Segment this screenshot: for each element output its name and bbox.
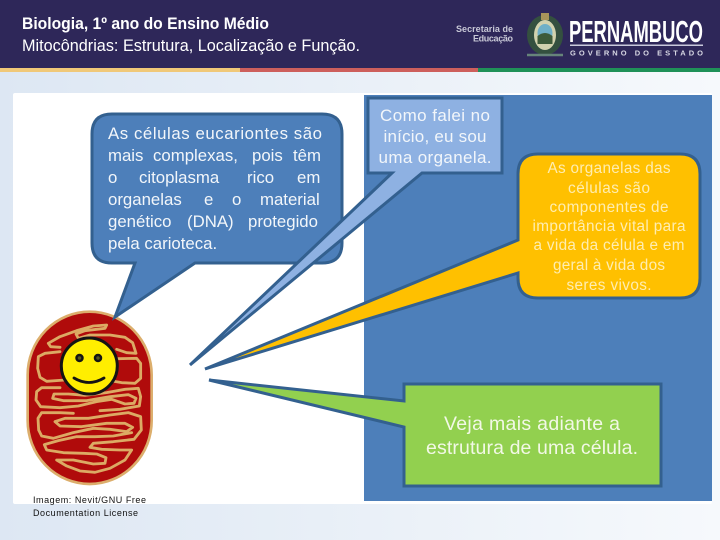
callout: importance of organelles: a vida da célula e em: [534, 237, 684, 254]
callout: see more ahead: [209, 380, 661, 486]
image credit: Documentation License: [33, 508, 138, 518]
callout: eukaryotic cells: citoplasma: [139, 168, 220, 187]
title: Biologia, 1º ano do Ensino Médio: [22, 15, 269, 33]
callout: eukaryotic cells: mais: [108, 146, 143, 165]
callout: see more ahead: Veja mais adiante a: [444, 413, 620, 435]
callout: importance of organelles: [205, 154, 700, 369]
image credit: Imagem: Nevit/GNU Free: [33, 495, 146, 505]
callout: organelle: uma organela.: [378, 148, 492, 167]
callout: eukaryotic cells: o: [108, 168, 117, 187]
blue background panel: [364, 95, 712, 501]
white content panel: [13, 93, 712, 504]
image credit: [33, 495, 146, 518]
title: [22, 15, 360, 55]
logo: Secretaria de Educação, Pernambuco: GOVERNO DO ESTADO: [570, 48, 703, 58]
callout: see more ahead: estrutura de uma célula.: [426, 437, 638, 459]
header band: [0, 0, 720, 72]
callout: eukaryotic cells: material: [260, 190, 320, 209]
callout: eukaryotic cells: protegido: [248, 212, 318, 231]
callout: eukaryotic cells: complexas,: [153, 146, 238, 165]
title: Mitocôndrias: Estrutura, Localização e Função.: [22, 37, 360, 55]
icon: smiley face: [61, 338, 117, 394]
callout: eukaryotic cells: pela carioteca.: [108, 234, 217, 253]
callout: eukaryotic cells: pois: [252, 146, 283, 165]
callout: eukaryotic cells: As células eucariontes são: [108, 124, 322, 143]
callout: eukaryotic cells: em: [297, 168, 320, 187]
callout: eukaryotic cells: têm: [293, 146, 321, 165]
callout: importance of organelles: células são: [568, 180, 650, 197]
callout: eukaryotic cells: (DNA): [187, 212, 234, 231]
callout: importance of organelles: componentes de: [550, 199, 668, 216]
callout: importance of organelles: As organelas das: [548, 160, 671, 177]
callout: organelle: [190, 98, 502, 365]
logo: Secretaria de Educação, Pernambuco: Educação: [473, 34, 514, 44]
logo: Secretaria de Educação, Pernambuco: Secretaria de: [456, 24, 513, 34]
callout: eukaryotic cells: e: [204, 190, 213, 209]
callout: organelle: início, eu sou: [384, 127, 486, 146]
callout: importance of organelles: seres vivos.: [566, 277, 652, 294]
icon: state crest: [527, 13, 563, 55]
callout: eukaryotic cells: [92, 114, 342, 317]
callout: importance of organelles: geral à vida dos: [553, 257, 665, 274]
callout: organelle: Como falei no: [380, 106, 490, 125]
callout: eukaryotic cells: rico: [247, 168, 274, 187]
logo: Secretaria de Educação, Pernambuco: [456, 13, 703, 58]
callout: eukaryotic cells: o: [232, 190, 241, 209]
callout: importance of organelles: importância vital para: [532, 218, 686, 235]
mitochondrion illustration: [28, 312, 152, 484]
callout: eukaryotic cells: genético: [108, 212, 171, 231]
callout: eukaryotic cells: organelas: [108, 190, 182, 209]
